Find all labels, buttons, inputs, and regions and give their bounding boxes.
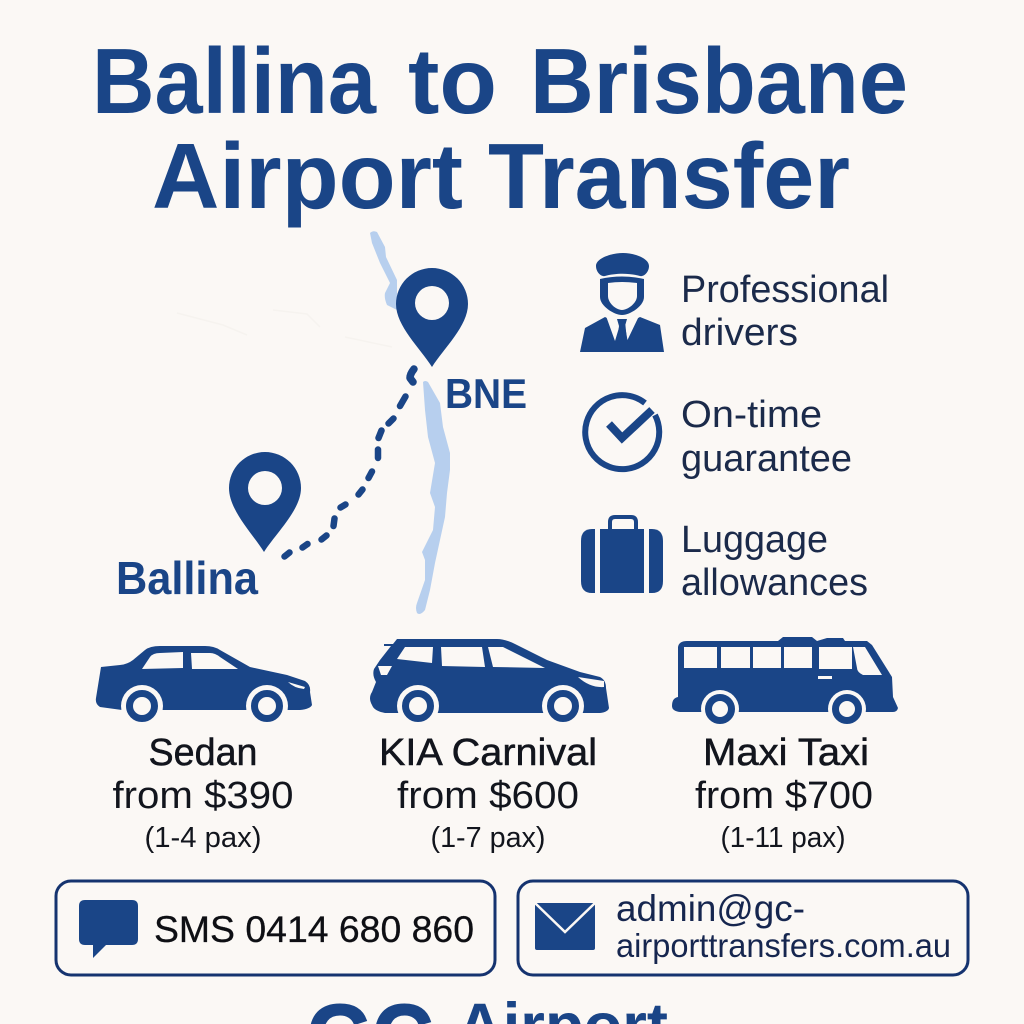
title: to: [408, 29, 497, 133]
text: drivers: [681, 312, 798, 354]
email address: admin@gc-: [616, 888, 805, 929]
vehicle: KIA Carnival: [370, 639, 609, 854]
text: KIA Carnival: [379, 732, 597, 774]
phone number: SMS 0414 680 860: [154, 909, 474, 950]
title: Ballina: [92, 29, 377, 133]
contact: SMS: [56, 881, 495, 975]
text: Maxi Taxi: [703, 732, 869, 774]
feature: professional drivers: [580, 253, 889, 354]
email address: [616, 888, 951, 964]
route map: [116, 231, 527, 614]
vehicle: maxi taxi: [672, 637, 898, 854]
text: (1-4 pax): [144, 822, 262, 854]
text: guarantee: [681, 438, 852, 480]
title: Brisbane: [530, 29, 908, 133]
text: [112, 732, 294, 854]
icon: envelope: [535, 903, 595, 950]
icon: suitcase: [581, 517, 663, 593]
icon: check clock: [585, 395, 659, 469]
icon: speech bubble: [79, 900, 138, 958]
title: [92, 29, 908, 228]
text: Luggage: [681, 519, 828, 561]
icon: minivan: [370, 639, 609, 727]
logo: [307, 990, 668, 1024]
icon: sedan: [96, 646, 312, 727]
text: Sedan: [148, 732, 258, 774]
text: [695, 732, 873, 854]
title: Airport: [152, 124, 463, 228]
text: from $390: [112, 775, 294, 817]
dashed route: [284, 369, 414, 556]
river: [370, 231, 450, 614]
text: [681, 394, 852, 480]
text: from $600: [397, 775, 579, 817]
text: On-time: [681, 394, 822, 436]
email address: airporttransfers.com.au: [616, 927, 951, 964]
text: [379, 732, 597, 854]
label: Ballina: Ballina: [116, 552, 258, 604]
text: Professional: [681, 269, 889, 311]
feature: on-time guarantee: [585, 394, 852, 480]
text: [681, 519, 868, 604]
title: Transfer: [488, 124, 850, 228]
icon: minibus: [672, 637, 898, 728]
text: [681, 269, 889, 354]
pin: BNE: [396, 268, 468, 367]
label: BNE: BNE: [445, 370, 527, 417]
pin: Ballina: [229, 452, 301, 552]
vehicle: sedan: [96, 646, 312, 854]
text: (1-11 pax): [720, 822, 846, 854]
text: allowances: [681, 562, 868, 604]
contact: email: [518, 881, 968, 975]
text: from $700: [695, 775, 873, 817]
icon: driver: [580, 253, 664, 352]
text: (1-7 pax): [430, 822, 546, 854]
feature: luggage allowances: [581, 517, 868, 604]
